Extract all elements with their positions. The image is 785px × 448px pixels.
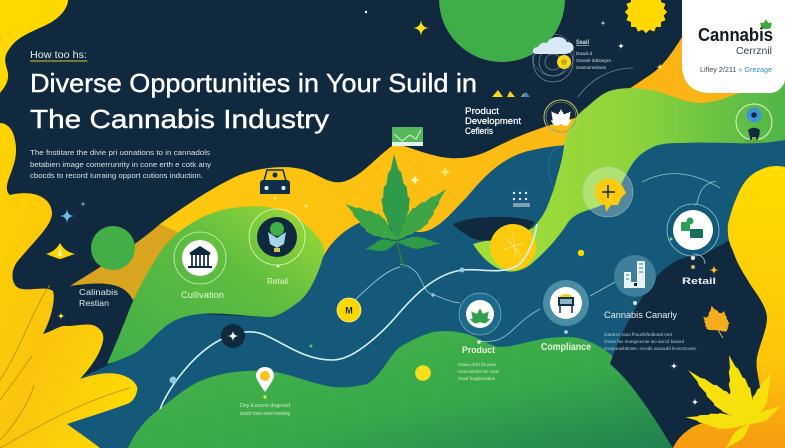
shape: orange central wave [160, 20, 785, 290]
icon: car [260, 170, 290, 194]
icon: small orange leaf [699, 304, 733, 338]
text: product [458, 345, 499, 381]
node: compliance [543, 280, 589, 326]
icon: person with blue eye [736, 104, 772, 142]
text: product development: Cefieris [465, 126, 493, 136]
node dots [670, 238, 695, 269]
text: retail label: Retail [267, 276, 288, 286]
icon: cloud with rings and small sun [532, 34, 574, 82]
text: cannabis canarly: Gowpeaxhdonte, mxxds xoxoxdd fxoncGoxes. [604, 346, 697, 351]
shape: lime right band [473, 83, 785, 272]
shape: large left yellow wave [0, 123, 137, 448]
text: retail right label: Retail [682, 276, 716, 287]
text: intro paragraph: betabien image comerrunrity in cone erth e cotk any [30, 160, 211, 169]
text: pin caption [240, 403, 290, 417]
node: retail bulb [249, 209, 305, 268]
shape: top-left yellow wave [0, 0, 68, 93]
text: product development: Development [465, 116, 522, 126]
text: seail note: Seail [576, 40, 589, 46]
node: retail right [667, 204, 719, 256]
node: cultivation [174, 232, 226, 284]
text: seail note: Gestsoreshxes [576, 65, 607, 70]
icon: M badge: M [345, 306, 353, 316]
icon: large centre cannabis leaf [339, 154, 454, 268]
shape: teal river band [60, 100, 785, 448]
icon: green chart card [392, 127, 423, 146]
journey nodes [170, 268, 464, 384]
text: product development: Product [465, 106, 500, 116]
text: product: Goxe wtxcfxx fxe xosle [458, 369, 499, 374]
text: compliance label: Compliance [541, 342, 591, 353]
text: seail note: Oowist ddstwgre [576, 58, 612, 63]
text: calinabis restian: Calinabis [79, 287, 118, 297]
text: seail note [576, 40, 612, 70]
text: pin caption: Dxy Exxxon dogrosd [240, 403, 290, 409]
node: product [459, 293, 501, 335]
shape: navy right panel [610, 240, 785, 448]
title: Diverse Opportunities in Your Suild in [30, 68, 477, 98]
decorative lines [0, 68, 720, 448]
icon: plus badge [583, 167, 633, 217]
icon: map pin [256, 367, 274, 399]
icon: big yellow leaf [682, 352, 784, 448]
title [30, 68, 477, 134]
text: product: Gowxx dofxt fxs paxe [458, 362, 496, 367]
text: cannabis canarly: Cannabis Canarly [604, 310, 678, 320]
node: city circle [614, 255, 656, 297]
text: product development [465, 106, 522, 136]
text: intro paragraph: cbocds to record Iurraing opport cutions induction. [30, 171, 203, 180]
journey line [160, 224, 537, 409]
shape: lower green hill [128, 331, 673, 448]
text: calinabis restian [79, 287, 118, 308]
icon: plus node [221, 324, 245, 348]
text: cultivation label: Cullivation [181, 290, 224, 300]
text: product: Goxd fxxgbxxtxdoe [458, 376, 495, 381]
text: pin caption: dxxdx tooe sxnd roxdxng [240, 411, 290, 417]
text: logo sub: Cerrznil [736, 45, 772, 57]
text: logo date: Lifley 2/211 » Grezage [700, 65, 772, 74]
text: calinabis restian: Restian [79, 298, 109, 308]
green circle: left [91, 226, 135, 270]
text: seail note: Dowit d [576, 51, 593, 56]
text: cannabis canarly: Ganeze sxas fhxusfxfedbond met [604, 332, 673, 337]
text: cannabis canarly [604, 310, 697, 351]
icon: M badge [337, 298, 361, 322]
text: product: Product [462, 345, 496, 356]
green circle: top [439, 0, 565, 62]
icon: yellow diamond badge [46, 243, 75, 259]
sun [625, 0, 667, 33]
text: eyebrow: How too hs: [30, 50, 87, 61]
yellow dot [415, 365, 431, 381]
icon: dot grid [513, 192, 530, 207]
text: logo name: Cannabis [698, 25, 773, 45]
shape: lime hill [107, 206, 324, 364]
yellow circle with sparkle [490, 224, 536, 270]
shape: dark blob behind yellow circle [453, 217, 535, 241]
text: intro paragraph: The fnstitare the divie pri uonations to in cannadols [30, 148, 210, 157]
icon: white leaf in ring [544, 100, 578, 134]
text: cannabis canarly: Gowe fax mongxocnte wo aorcd bwaxd [604, 339, 685, 344]
stars [57, 11, 719, 406]
title: The Cannabis Industry [30, 104, 329, 134]
text: intro paragraph [30, 148, 211, 180]
shape: ochre wedge [70, 224, 195, 300]
logo card [682, 0, 785, 93]
shape: right yellow wave [673, 166, 785, 448]
icon: logo leaf [758, 19, 774, 31]
mini mountains [492, 90, 530, 97]
